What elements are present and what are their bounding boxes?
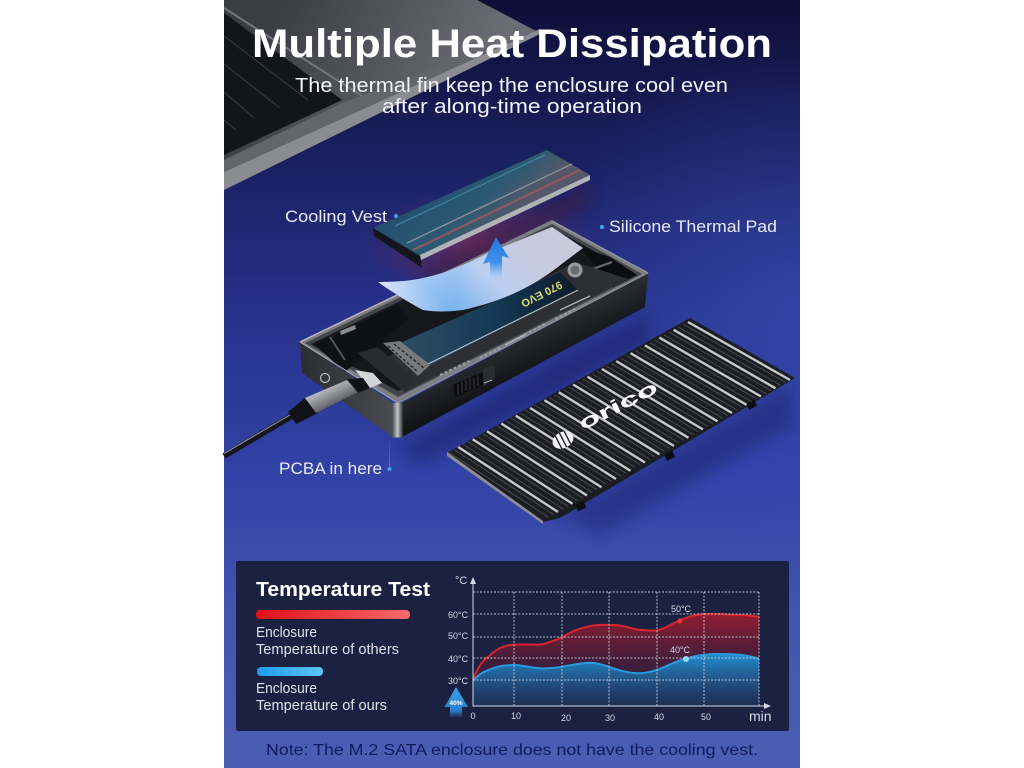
lift arrow: [483, 237, 509, 280]
subtitle: The thermal fin keep the enclosure cool even: [295, 74, 728, 97]
legend: others: Enclosure: [256, 625, 317, 641]
subtitle: after along-time operation: [382, 95, 642, 118]
40% improvement arrow: 40%: [449, 700, 463, 707]
callout: cooling vest: Cooling Vest: [285, 207, 387, 226]
line chart: min: [749, 708, 772, 724]
title: Multiple Heat Dissipation: [252, 22, 772, 66]
line chart: 30°C: [448, 676, 469, 686]
line chart: 20: [561, 713, 571, 723]
callout: PCBA: [279, 438, 392, 478]
line chart: 40°C: [448, 654, 469, 664]
cooling vest: [373, 150, 590, 268]
legend: others: [256, 610, 410, 658]
blue area: ours: [473, 654, 759, 706]
brand icon: [550, 428, 576, 452]
footnote: Note: The M.2 SATA enclosure does not have the cooling vest.: [266, 742, 758, 759]
line chart: 50°C: [448, 631, 469, 641]
panel: temperature test: [236, 561, 789, 731]
laptop in the top-left corner: [224, 0, 540, 190]
line chart: 10: [511, 711, 521, 721]
line chart: 60°C: [448, 610, 469, 620]
thermal pad: [378, 227, 583, 312]
legend: others: Temperature of others: [256, 642, 399, 658]
line chart: 40°C: [670, 645, 691, 655]
power icon: [320, 374, 330, 382]
line chart: 0: [470, 711, 476, 721]
enclosure body: [300, 220, 648, 438]
infographic canvas: [222, 0, 800, 768]
exploded enclosure illustration: [224, 150, 795, 535]
callout: PCBA: PCBA in here: [279, 459, 382, 478]
line chart: °C: [455, 575, 467, 587]
legend: ours: Enclosure: [256, 681, 317, 697]
legend heading: Temperature Test: [256, 579, 430, 601]
SSD circuit board: [355, 262, 628, 392]
SSD label text: 970 EVO: [518, 278, 564, 309]
line chart: 30: [605, 713, 615, 723]
line chart: 50°C: [671, 604, 692, 614]
line chart: 50: [701, 712, 711, 722]
red area: others: [473, 614, 759, 706]
40% improvement arrow: [444, 687, 468, 718]
background: [224, 0, 800, 768]
legend: ours: Temperature of ours: [256, 698, 387, 714]
USB cable: [224, 378, 370, 456]
right chamber: [580, 247, 637, 287]
line chart: 40: [654, 712, 664, 722]
legend: ours: [256, 667, 387, 714]
slide switch: [453, 365, 495, 397]
brand logo: orico: [575, 377, 662, 435]
subtitle: [295, 74, 728, 118]
callout: silicone thermal pad: Silicone Thermal Pad: [609, 217, 777, 236]
finned heat sink: [447, 318, 795, 524]
left chamber: [315, 305, 410, 372]
line chart: [448, 575, 772, 724]
